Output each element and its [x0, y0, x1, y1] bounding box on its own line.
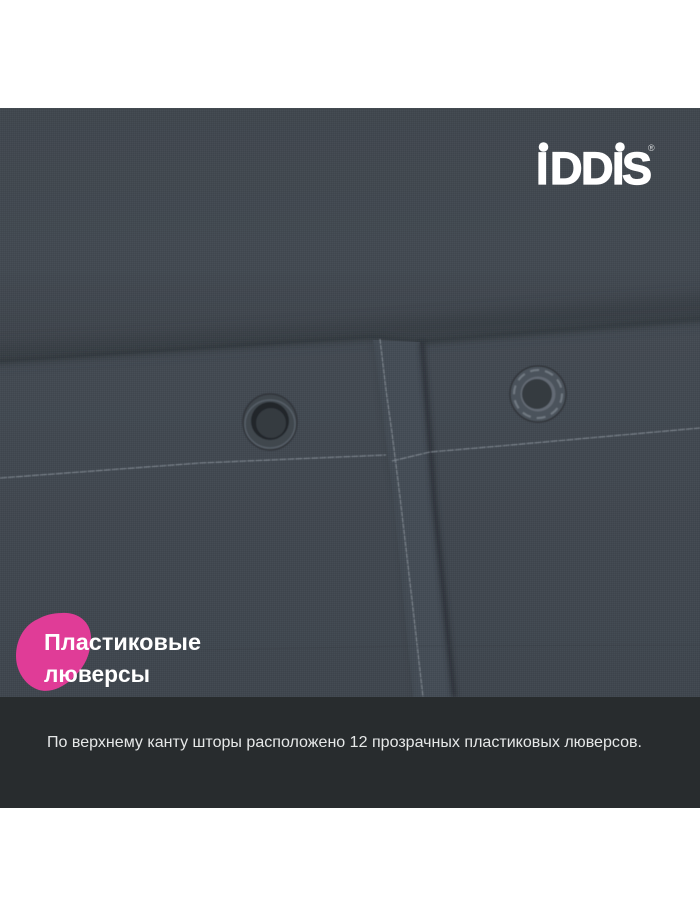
logo: IDDIS: ®: [648, 143, 655, 153]
logo: IDDIS: I: [612, 143, 625, 194]
fabric weave texture: [0, 108, 700, 697]
heading: Пластиковые: [44, 629, 201, 655]
hem stitching: [0, 428, 700, 478]
panel: fabric photo: [0, 108, 700, 697]
logo: IDDIS: D: [550, 143, 582, 194]
heading: [44, 629, 201, 687]
pleat stitching: [380, 339, 423, 697]
logo: IDDIS: D: [581, 143, 614, 194]
lower hem fabric: [0, 368, 700, 697]
icon: right grommet: [510, 366, 566, 422]
caption text: По верхнему канту шторы расположено 12 прозрачных пластиковых люверсов.: [47, 734, 642, 751]
logo: IDDIS: S: [622, 143, 652, 194]
lower seam: [416, 646, 418, 647]
heading: люверсы: [44, 661, 150, 687]
pleat: [373, 339, 454, 697]
upper curtain fabric: [0, 108, 700, 368]
logo: IDDIS: I: [536, 143, 549, 194]
panel: caption bar: [0, 697, 700, 808]
icon: left grommet: [243, 394, 297, 450]
shadow above hem fold: [0, 305, 700, 366]
pink accent blob: [16, 613, 91, 691]
logo: IDDIS: [536, 142, 655, 194]
